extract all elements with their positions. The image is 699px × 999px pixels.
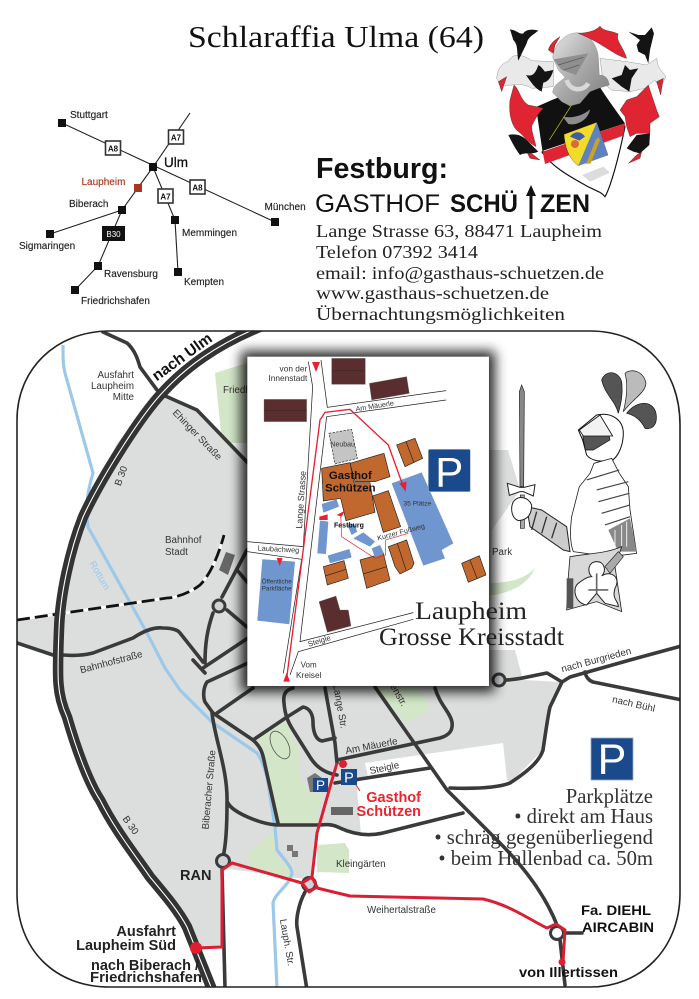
- inset labels: Lange Strasse: [294, 471, 308, 529]
- roundabout: RAN: [216, 854, 230, 868]
- label: nach Biberach Friedrichshafen: [91, 959, 202, 982]
- label: nach Biberach Friedrichshafen: nach Biberach /: [91, 958, 199, 974]
- mantling: white: [497, 55, 666, 92]
- street labels: Mitte: [113, 392, 135, 403]
- urban grey area: [17, 392, 562, 947]
- town heading: Laupheim: [415, 598, 528, 625]
- orange buildings: [322, 438, 486, 588]
- inset labels: Laubachweg: [257, 544, 299, 555]
- parking information text: • beim Hallenbad ca. 50m: [438, 848, 653, 870]
- street labels: Lange Str.: [330, 684, 349, 730]
- city labels: Kempten: [184, 277, 224, 288]
- inset labels: Steigle: [307, 633, 332, 649]
- street labels: [79, 370, 656, 967]
- roundabout: Bahnhof: [213, 600, 225, 612]
- road badge B30: [102, 226, 125, 241]
- motorway badge A7 north: [168, 130, 184, 144]
- inset labels: Kreisel: [296, 670, 322, 680]
- building: Kleingärten: [287, 845, 298, 857]
- parking sign large: P: [598, 736, 626, 784]
- street labels: Kapellenstr.: [374, 659, 409, 708]
- logo: Gasthof Schützen: [315, 185, 590, 219]
- motorway badge A7 south: A7: [160, 192, 171, 202]
- city labels: Ulm: [164, 155, 188, 170]
- green areas: [215, 363, 535, 880]
- street labels: Rottum: [87, 559, 112, 592]
- inset labels: [257, 364, 431, 680]
- street labels: Ausfahrt: [98, 370, 134, 381]
- label: Ausfahrt Laupheim Süd: Ausfahrt: [116, 924, 176, 940]
- railway line: [17, 535, 224, 620]
- label: Fa. Diehl Aircabin: AIRCABIN: [582, 919, 654, 935]
- inset labels: Am Mäuerle: [355, 399, 394, 413]
- inset labels: Vom: [301, 661, 317, 670]
- street labels: Kleingärten: [336, 859, 386, 870]
- label: von Illertissen: von Illertissen: [519, 965, 618, 980]
- motorway badge A8 west: [106, 141, 120, 155]
- city labels: Friedrichshafen: [81, 296, 150, 307]
- mantling: black leaves: [508, 27, 654, 155]
- street labels: Stadt: [165, 547, 188, 558]
- heading: Festburg: Festburg:: [316, 153, 448, 185]
- parking sign large: [591, 736, 633, 784]
- parking sign small west: [313, 778, 328, 793]
- highway overview map: [19, 110, 306, 307]
- parking sign small west: P: [316, 778, 325, 793]
- inset streets: [247, 360, 446, 675]
- plumes: [602, 371, 656, 429]
- destination dot: [339, 760, 347, 768]
- building: train station: [219, 552, 235, 575]
- helmet: [553, 33, 609, 106]
- street labels: Friedhof: [223, 385, 259, 396]
- inset detail map: [247, 357, 489, 686]
- B30 highway: [58, 326, 262, 992]
- pointer to Gasthof: [356, 785, 360, 791]
- label: RAN: RAN: [180, 868, 211, 884]
- town heading: [379, 598, 564, 651]
- street labels: Park: [492, 547, 512, 558]
- roundabout: east: [493, 674, 505, 686]
- motorway badge A7 south: [158, 189, 173, 203]
- city labels: Memmingen: [182, 228, 237, 239]
- armour body: [567, 458, 637, 612]
- label: Gasthof Schützen: Gasthof: [366, 790, 421, 806]
- town heading: Grosse Kreisstadt: [379, 624, 564, 651]
- inset labels: von der: [280, 364, 308, 374]
- helmet: [578, 414, 623, 461]
- street labels: Bahnhof: [165, 535, 202, 546]
- roundabout: Diehl: [550, 926, 564, 940]
- parking information text: • schräg gegenüberliegend: [434, 827, 654, 849]
- city labels: Biberach: [69, 199, 108, 210]
- contact details text block: [316, 221, 604, 324]
- street labels: Am Mäuerle: [345, 736, 399, 757]
- icon: Laupheim marker: [134, 184, 142, 192]
- label: Gasthof Schützen: Schützen: [357, 804, 421, 820]
- inset labels: Parkfläche: [262, 586, 292, 593]
- inset labels: 35 Plätze: [403, 500, 431, 507]
- street labels: B 30: [120, 814, 141, 837]
- street labels: Biberacher Straße: [201, 749, 219, 830]
- street labels: Weihertalstraße: [367, 905, 437, 916]
- blue parking areas: [257, 472, 453, 624]
- route start dot: [190, 942, 202, 954]
- street labels: Ehinger Straße: [170, 408, 224, 463]
- street labels: nach Burgrieden: [560, 646, 633, 675]
- street labels: B 30: [113, 464, 130, 487]
- city labels: München: [264, 202, 306, 213]
- building: Gasthof block: [331, 807, 353, 815]
- label: Ausfahrt Laupheim Süd: Laupheim Süd: [76, 938, 176, 954]
- route to parking: [287, 409, 408, 678]
- parking sign: [428, 449, 470, 496]
- knight illustration: [507, 371, 656, 612]
- river Rottum: [63, 345, 292, 988]
- parking sign small east: [341, 769, 357, 786]
- street labels: nach Bühl: [611, 694, 656, 715]
- inset labels: Innenstadt: [268, 373, 308, 383]
- coat of arms with helmet: [497, 26, 666, 197]
- label: Fa. Diehl Aircabin: Fa. DIEHL: [581, 902, 651, 918]
- map frame: [17, 331, 680, 987]
- inset label: Gasthof Schützen: Schützen: [325, 483, 376, 495]
- inset labels: Kurzer Fußweg: [376, 522, 426, 543]
- neubau extension: [329, 429, 357, 464]
- street labels: Bahnhofstraße: [79, 649, 144, 676]
- arm and gauntlet: [512, 498, 570, 552]
- street labels: Steigle: [369, 760, 401, 777]
- mantling: red leaves: [498, 26, 663, 163]
- grey wedge park edge: [490, 450, 517, 530]
- label: Ausfahrt Laupheim Süd: [76, 924, 176, 954]
- inset labels: Neubau: [330, 442, 355, 449]
- logo: Gasthof Schützen: ZEN: [540, 190, 590, 218]
- city labels: [19, 110, 306, 307]
- city labels: Laupheim: [82, 177, 125, 188]
- building: near parking: [307, 773, 322, 792]
- parking information text: • direkt am Haus: [514, 806, 653, 828]
- contact details text block: www.gasthaus-schuetzen.de: [316, 283, 549, 303]
- shield: [537, 83, 625, 197]
- city labels: Ravensburg: [104, 269, 158, 280]
- motorway badge A8 east: [190, 180, 205, 194]
- driving route in red: [196, 763, 565, 962]
- inset label: Festburg: Festburg: [334, 522, 364, 529]
- motorway badge A7 north: A7: [171, 134, 182, 142]
- label: Fa. Diehl Aircabin: [582, 906, 653, 932]
- motorway badge A8 west: A8: [108, 144, 119, 154]
- town map panel: [17, 326, 685, 992]
- label: nach Ulm: nach Ulm: [149, 330, 216, 385]
- city labels: Stuttgart: [70, 110, 108, 121]
- city labels: Sigmaringen: [19, 241, 75, 252]
- parking information text: [434, 786, 654, 870]
- contact details text block: email: info@gasthaus-schuetzen.de: [316, 263, 604, 283]
- route dot Illertissen: [558, 958, 566, 966]
- street labels: Laupheim: [91, 381, 134, 392]
- logo: Gasthof Schützen: SCHÜ: [450, 189, 518, 218]
- parking information text: Parkplätze: [566, 786, 653, 808]
- label: Gasthof Schützen: [357, 791, 421, 816]
- oval sports track: [270, 730, 290, 760]
- roundabout: Weihertalstrasse: [302, 878, 316, 890]
- inset labels: Öffentliche: [262, 577, 292, 585]
- street labels: Lauph. Str.: [277, 918, 296, 967]
- title: Schlaraffia Ulma (64): [188, 19, 484, 54]
- inset label: Gasthof Schützen: Gasthof: [329, 470, 372, 482]
- inset shadow: [241, 351, 495, 692]
- contact details text block: Lange Strasse 63, 88471 Laupheim: [316, 221, 602, 241]
- label: nach Biberach Friedrichshafen: Friedrichshafen: [90, 970, 202, 986]
- local roads: [17, 332, 685, 990]
- parking sign: P: [435, 449, 463, 496]
- road badge B30: B30: [106, 230, 121, 239]
- motorway badge A8 east: A8: [192, 184, 203, 192]
- sword: [507, 385, 535, 528]
- contact details text block: Telefon 07392 3414: [316, 242, 478, 262]
- direction arrows: [277, 362, 407, 682]
- logo: Gasthof Schützen: GASTHOF: [315, 190, 440, 218]
- dark brown buildings: [264, 358, 409, 632]
- inset label: Gasthof Schützen: [325, 470, 376, 495]
- parking sign small east: P: [344, 770, 354, 786]
- trefoil emblem: [575, 552, 623, 607]
- contact details text block: Übernachtungsmöglichkeiten: [316, 304, 565, 324]
